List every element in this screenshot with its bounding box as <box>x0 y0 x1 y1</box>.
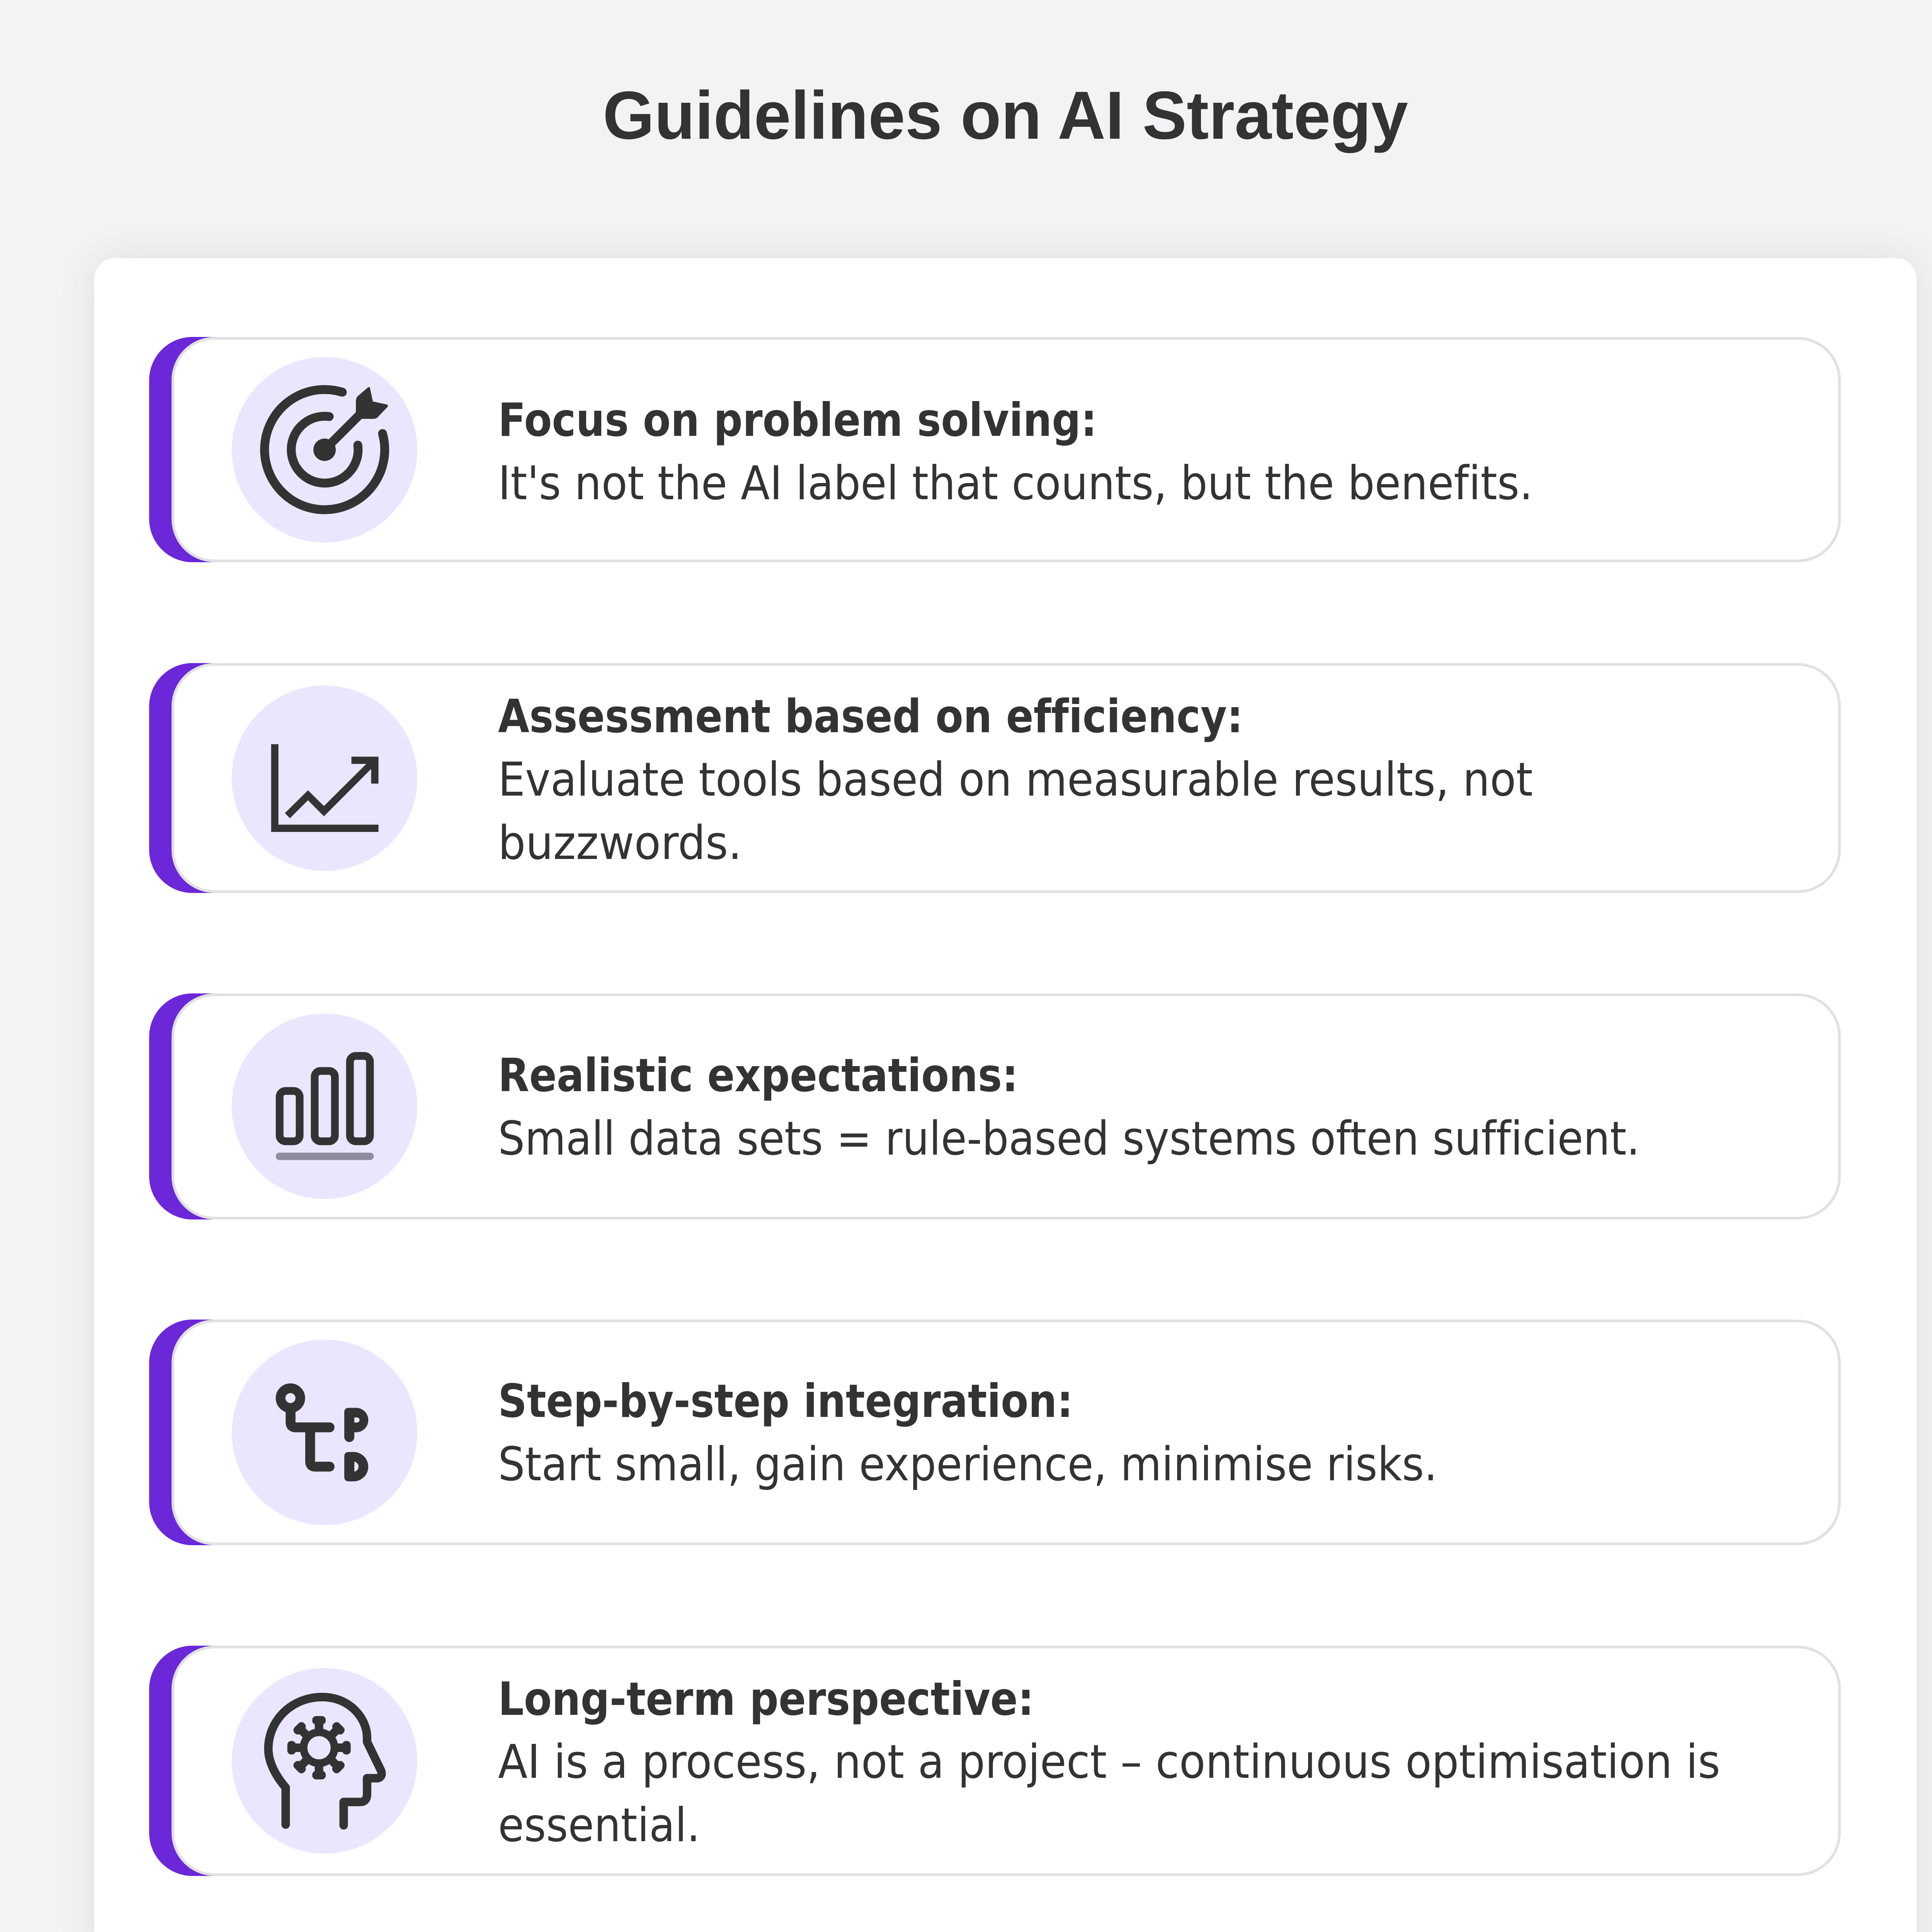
purple accent <box>149 337 265 562</box>
icon: bar chart <box>232 1014 417 1199</box>
purple accent <box>149 1646 265 1876</box>
body text line 1: AI is a process, not a project – continuous optimisation is <box>498 1735 1720 1789</box>
card outline <box>173 338 1839 561</box>
panel: step-by-step integration <box>149 1320 1839 1545</box>
body text: Small data sets = rule-based systems often sufficient. <box>498 1112 1640 1166</box>
panel: assessment based on efficiency <box>149 663 1839 893</box>
card outline <box>173 1647 1839 1875</box>
heading: Long-term perspective: <box>498 1673 1034 1726</box>
icon: rising line chart <box>232 685 417 871</box>
body text line 2: essential. <box>498 1799 700 1852</box>
panel: focus on problem solving <box>149 337 1839 562</box>
icon: plan to do flow <box>232 1340 417 1525</box>
heading: Realistic expectations: <box>498 1049 1018 1102</box>
purple accent <box>149 663 265 893</box>
body text line 1: Evaluate tools based on measurable results, not <box>498 753 1533 807</box>
heading: Assessment based on efficiency: <box>498 690 1243 743</box>
body text: It's not the AI label that counts, but the benefits. <box>498 457 1533 510</box>
card outline <box>173 665 1839 892</box>
heading: Focus on problem solving: <box>498 394 1097 447</box>
body text: Start small, gain experience, minimise risks. <box>498 1438 1437 1492</box>
panel: realistic expectations <box>149 993 1839 1219</box>
panel: long-term perspective <box>149 1646 1839 1876</box>
heading: Step-by-step integration: <box>498 1375 1073 1428</box>
icon: head with gear <box>232 1668 417 1854</box>
card outline <box>173 995 1839 1218</box>
icon: target with arrow <box>232 357 417 543</box>
body text line 2: buzzwords. <box>498 816 742 870</box>
card outline <box>173 1321 1839 1544</box>
purple accent <box>149 993 265 1219</box>
title: Guidelines on AI Strategy <box>603 78 1408 153</box>
purple accent <box>149 1320 265 1545</box>
